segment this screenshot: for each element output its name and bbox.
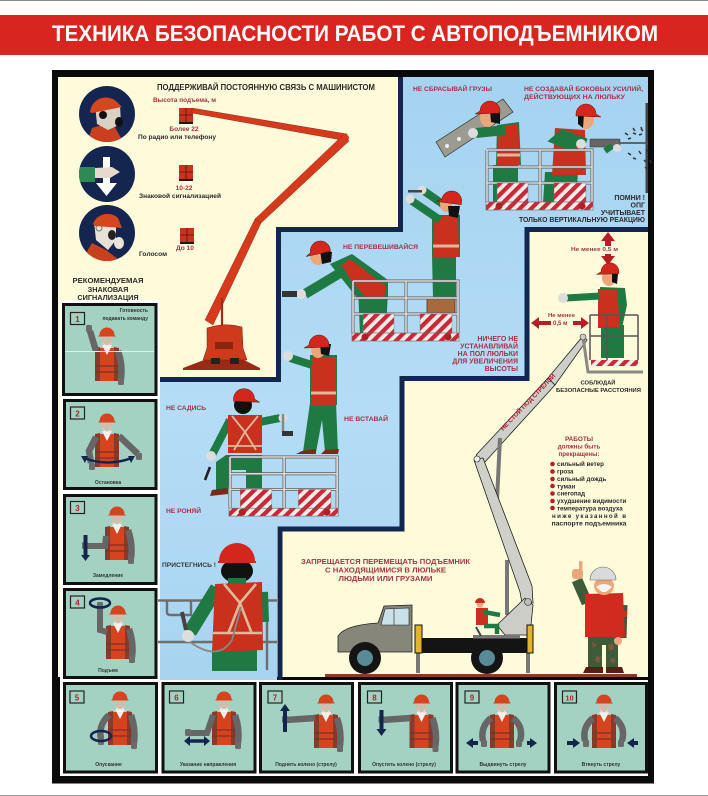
figure raise knee [280, 694, 343, 752]
number 2: 2 [75, 410, 80, 418]
platform basket 1 [486, 150, 593, 210]
text: remember: ОПГ [631, 202, 645, 210]
text: remember: ПОМНИ ! [614, 195, 645, 202]
heading: recommended signalling: РЕКОМЕНДУЕМАЯ [72, 276, 144, 285]
text: do not drop: НЕ СБРАСЫВАЙ ГРУЗЫ [413, 84, 492, 93]
figure slow down [81, 506, 134, 564]
worker with beam [436, 99, 521, 203]
label: 10-22: 10-22 [176, 185, 193, 192]
big worker with harness [182, 543, 263, 671]
caption ready [102, 308, 148, 322]
text: keep safe distances: БЕЗОПАСНЫЕ РАССТОЯНИЯ [556, 388, 641, 394]
signal panel 4 [64, 590, 156, 678]
figure raise [90, 598, 135, 663]
red lift illustration [179, 108, 349, 370]
signal panel 6 [163, 684, 255, 772]
signal panel 2 [64, 400, 156, 488]
caption ready: подавать команду [102, 316, 148, 322]
inspector with raised finger [572, 561, 627, 673]
text: do not place on floor: УСТАНАВЛИВАЙ [460, 342, 518, 350]
panel: constant communication with operator [72, 81, 375, 370]
signal panel 7 [260, 684, 352, 772]
number 4: 4 [75, 598, 80, 608]
text: moving forbidden [301, 557, 470, 583]
panel: do not lean out and do not raise floor [282, 186, 518, 373]
caption extend boom: Выдвинуть стрелу [480, 762, 527, 768]
title banner [0, 15, 708, 55]
signal panel 8 [360, 684, 452, 772]
text: do not drop: НЕ РОНЯЙ [166, 506, 201, 515]
figure lower [91, 692, 137, 749]
label: lift height: Высота подъема, м [153, 97, 216, 104]
label: horizontal clearance [548, 313, 575, 327]
text: stop work conditions: туман [557, 484, 575, 490]
text: moving forbidden: ЗАПРЕЩАЕТСЯ ПЕРЕМЕЩАТЬ ПОДЪЕМНИК [301, 557, 470, 566]
text: remember: ТОЛЬКО ВЕРТИКАЛЬНУЮ РЕАКЦИЮ [519, 217, 645, 224]
caption lower: Опускание [95, 762, 122, 768]
signal panel 9 [457, 684, 549, 772]
text: stop work conditions: сильный дождь [557, 476, 606, 483]
text: do not place on floor [452, 336, 518, 373]
text: stop work conditions [550, 436, 627, 528]
text: stop work conditions: сильный ветер [557, 461, 604, 468]
signal panel 5 [64, 684, 156, 772]
arrow: vertical distance [601, 232, 615, 265]
label: up to 10: До 10 [176, 245, 194, 252]
silver boom [474, 336, 587, 635]
icon: radio operator [79, 86, 135, 145]
label: horizontal clearance: 0,5 м [553, 321, 568, 327]
number 10: 10 [565, 694, 574, 702]
text: do not place on floor: ДЛЯ УВЕЛИЧЕНИЯ [452, 358, 518, 366]
icon: voice command [79, 205, 135, 262]
worker with drill [543, 104, 648, 203]
label: sign signalling: Знаковой сигнализацией [139, 192, 221, 200]
text: stop work conditions: паспорте подъемника [552, 520, 627, 528]
heading: communication: ПОДДЕРЖИВАЙ ПОСТОЯННУЮ СВЯЗЬ С МАШИНИСТОМ [157, 81, 375, 92]
text: do not place on floor: НИЧЕГО НЕ [477, 336, 518, 343]
worker standing on bricks [406, 186, 463, 313]
panel: fasten the harness [158, 543, 277, 671]
heading: recommended signalling [72, 276, 144, 302]
label: over 22: Более 22 [169, 126, 199, 133]
caption ready: Готовность [120, 308, 148, 314]
arrows: horizontal distance [531, 317, 589, 329]
text: stop work conditions: температура воздуха [557, 506, 623, 512]
signal panel 3 [64, 496, 156, 584]
number 1: 1 [75, 315, 80, 324]
worker with hammer standing on rail [283, 335, 339, 454]
text: moving forbidden: ЛЮДЬМИ ИЛИ ГРУЗАМИ [338, 574, 432, 583]
number 7: 7 [273, 694, 278, 702]
text: do not place on floor: ВЫСОТЫ [485, 366, 518, 373]
text: remember [519, 195, 646, 224]
caption raise: Подъем [98, 668, 118, 674]
caption lower knee: Опустить колено (стрелу) [372, 762, 436, 768]
number 3: 3 [75, 504, 80, 513]
worker in basket [558, 263, 643, 372]
platform basket 3 [229, 457, 338, 516]
title: ТЕХНИКА БЕЗОПАСНОСТИ РАБОТ С АВТОПОДЪЕМНИКОМ [52, 21, 658, 46]
panel: safe distances [531, 232, 643, 394]
figure extend boom [466, 694, 537, 748]
text: do not sit: НЕ САДИСЬ [166, 405, 206, 412]
text: fasten: ПРИСТЕГНИСЬ ! [162, 562, 216, 569]
label: horizontal clearance: Не менее [548, 313, 575, 319]
railing [158, 600, 277, 670]
truck [338, 605, 533, 674]
text: no side forces: НЕ СОЗДАВАЙ БОКОВЫХ УСИЛИЙ, [524, 84, 643, 93]
worker leaning out [282, 239, 388, 335]
text: do not place on floor: НА ПОЛ ЛЮЛЬКИ [458, 351, 518, 358]
caption direction: Указание направления [180, 762, 236, 768]
signal panel 10 [556, 684, 646, 772]
text: moving forbidden: С НАХОДЯЩИМИСЯ В ЛЮЛЬКЕ [325, 566, 446, 574]
caption stop: Остановка [95, 480, 121, 486]
text: do not stand: НЕ ВСТАВАЙ [344, 414, 388, 423]
text: no side forces: ДЕЙСТВУЮЩИХ НА ЛЮЛЬКУ [524, 92, 626, 101]
sparks [625, 127, 651, 169]
figure lower knee [376, 694, 438, 752]
text: stop work conditions: прекращены: [558, 451, 600, 458]
number 8: 8 [372, 694, 377, 702]
text: stop work conditions: должны быть [558, 444, 600, 450]
platform basket 2 [352, 281, 459, 341]
panel: forbidden moving and truck [301, 336, 637, 677]
seated operator [475, 598, 500, 636]
number 6: 6 [174, 694, 179, 702]
label: by voice: Голосом [139, 251, 167, 258]
signal panel 1 [64, 304, 156, 394]
text: boom warning: НЕ СТОЙ ПОД СТРЕЛОЙ [499, 372, 557, 432]
caption retract boom: Втянуть стрелу [582, 762, 621, 768]
poster frame [52, 70, 654, 784]
heading: recommended signalling: ЗНАКОВАЯ [88, 285, 128, 294]
text: stop work conditions: снегопад [557, 490, 585, 498]
text: keep safe distances [556, 378, 641, 394]
text: stop work conditions: ниже указанной в [552, 513, 626, 520]
text: do not lean out: НЕ ПЕРЕВЕШИВАЙСЯ [343, 242, 418, 251]
number 5: 5 [75, 694, 80, 702]
panel: do not drop loads and side loads [413, 84, 651, 224]
figure direction [184, 692, 241, 749]
figure stop [81, 414, 142, 470]
caption raise knee: Поднять колено (стрелу) [275, 762, 337, 768]
text: stop work conditions: РАБОТЫ [565, 436, 593, 443]
text: keep safe distances: СОБЛЮДАЙ [581, 378, 615, 386]
figure ready [86, 325, 124, 385]
worker sitting on rail [205, 389, 293, 496]
label: vertical clearance: Не менее 0,5 м [571, 247, 618, 253]
figure retract boom [567, 694, 638, 748]
text: remember: УЧИТЫВАЕТ [601, 210, 646, 217]
label: radio or phone: По радио или телефону [138, 134, 216, 141]
text: stop work conditions: гроза [557, 468, 574, 476]
icon: hand signal [78, 146, 135, 202]
ground line [325, 674, 637, 677]
panel: do not sit, stand, drop [166, 335, 388, 516]
text: no side forces [524, 84, 643, 101]
caption slow down: Замедление [93, 573, 123, 579]
text: stop work conditions: ухудшение видимости [557, 498, 627, 505]
number 9: 9 [470, 694, 475, 702]
heading: recommended signalling: СИГНАЛИЗАЦИЯ [77, 293, 139, 302]
